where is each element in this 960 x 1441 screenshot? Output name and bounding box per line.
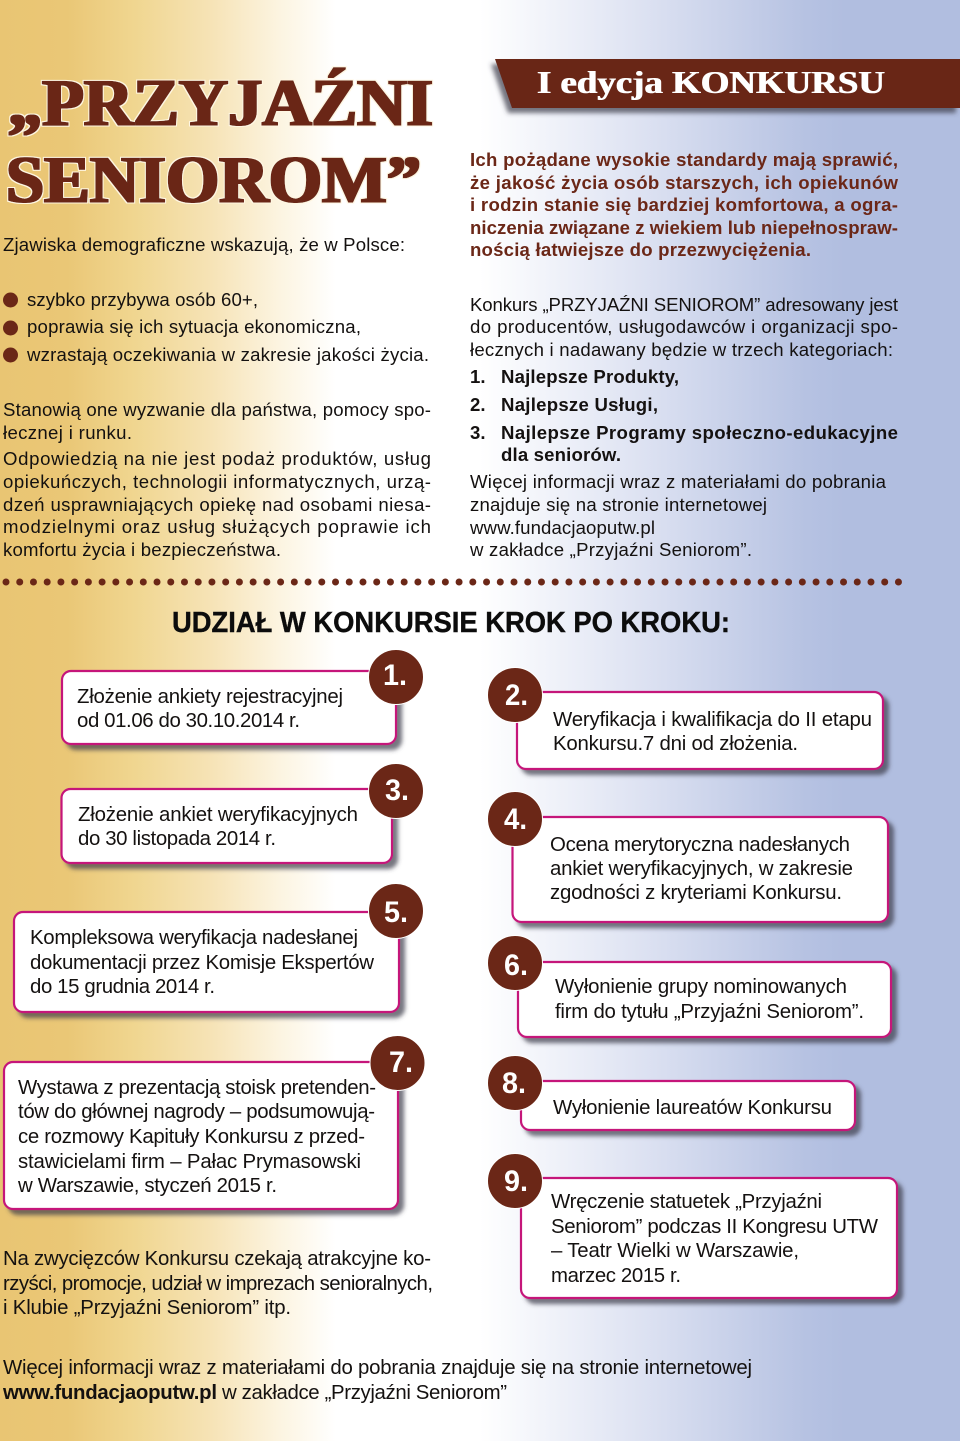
step 1: Złożenie ankiety rejestracyjnej xyxy=(77,686,343,708)
text block: response: opiekuńczych, technologii informatycznych, urzą- xyxy=(3,471,431,492)
footer text: www.fundacjaoputw.pl xyxy=(2,1382,217,1404)
text block: more information: Więcej informacji wraz z materiałami do pobrania xyxy=(470,471,887,492)
step 1 xyxy=(62,650,424,744)
step 1: 1. xyxy=(383,659,407,692)
footer text: w zakładce „Przyjaźni Seniorom” xyxy=(221,1382,507,1404)
step 5: do 15 grudnia 2014 r. xyxy=(30,976,215,998)
footer text: Więcej informacji wraz z materiałami do pobrania znajduje się na stronie internetowej xyxy=(3,1357,752,1379)
step 6: 6. xyxy=(504,949,528,982)
text block: standards (brown bold): nością łatwiejsze do przezwyciężenia. xyxy=(470,239,811,260)
text block: standards (brown bold): że jakość życia osób starszych, ich opiekunów xyxy=(470,172,899,193)
text block: standards (brown bold) xyxy=(470,149,899,260)
step 8: 8. xyxy=(502,1067,526,1100)
step 7: ce rozmowy Kapituły Konkursu z przed- xyxy=(18,1126,365,1148)
text block: more information: znajduje się na stronie internetowej xyxy=(470,494,767,515)
text block: response xyxy=(3,448,431,560)
bullet list: szybko przybywa osób 60+, xyxy=(27,289,258,310)
step 3 xyxy=(62,764,424,863)
category list: Najlepsze Usługi, xyxy=(501,394,658,415)
text block: standards (brown bold): i rodzin stanie się bardziej komfortowa, a ogra- xyxy=(470,194,898,215)
category list: Najlepsze Programy społeczno-edukacyjne xyxy=(501,422,898,443)
bullet list xyxy=(3,289,429,365)
text block: more information: w zakładce „Przyjaźni Seniorom”. xyxy=(469,539,752,560)
step 7: w Warszawie, styczeń 2015 r. xyxy=(17,1175,277,1197)
step 2: Weryfikacja i kwalifikacja do II etapu xyxy=(553,709,872,731)
step 2: 2. xyxy=(505,679,528,712)
text block: prizes: i Klubie „Przyjaźni Seniorom” itp. xyxy=(3,1297,291,1319)
step 5: dokumentacji przez Komisje Ekspertów xyxy=(30,952,374,974)
category list: Najlepsze Produkty, xyxy=(501,366,679,387)
step 1: od 01.06 do 30.10.2014 r. xyxy=(77,710,300,732)
category list: 1. xyxy=(470,366,486,387)
step 4: zgodności z kryteriami Konkursu. xyxy=(550,882,842,904)
banner: I edycja KONKURSU: I edycja KONKURSU xyxy=(537,64,885,100)
text block: challenge: łecznej i runku. xyxy=(3,422,132,443)
text block: contest description: Konkurs „PRZYJAŹNI SENIOROM” adresowany jest xyxy=(470,294,899,315)
step 8 xyxy=(488,1056,855,1130)
step 4: Ocena merytoryczna nadesłanych xyxy=(550,834,850,856)
text block: challenge: Stanowią one wyzwanie dla państwa, pomocy spo- xyxy=(3,399,431,420)
text block: standards (brown bold): Ich pożądane wysokie standardy mają sprawić, xyxy=(470,149,898,170)
step 2 xyxy=(488,668,883,769)
step 9: Wręczenie statuetek „Przyjaźni xyxy=(551,1191,822,1213)
text block: more information: www.fundacjaoputw.pl xyxy=(469,517,655,538)
text block: response: Odpowiedzią na nie jest podaż produktów, usług xyxy=(3,448,431,469)
step 3: 3. xyxy=(385,774,409,807)
title: SENIOROM” xyxy=(6,143,421,217)
bullet list: wzrastają oczekiwania w zakresie jakości życia. xyxy=(26,344,429,365)
bullet list: poprawia się ich sytuacja ekonomiczna, xyxy=(27,316,361,337)
step 7: stawicielami firm – Pałac Prymasowski xyxy=(18,1151,361,1173)
text block: response: modzielnymi oraz usług służących poprawie ich xyxy=(3,516,431,537)
step 3: Złożenie ankiet weryfikacyjnych xyxy=(78,804,358,826)
dotted separator xyxy=(6,578,900,586)
step 6: Wyłonienie grupy nominowanych xyxy=(555,976,847,998)
text block: response: dzeń usprawniających opiekę nad osobami niesa- xyxy=(3,494,431,515)
text block: response: komfortu życia i bezpieczeństwa. xyxy=(3,539,281,560)
category list: 2. xyxy=(470,394,486,415)
step 9: 9. xyxy=(504,1165,528,1198)
step 5: Kompleksowa weryfikacja nadesłanej xyxy=(30,927,358,949)
step 2: Konkursu.7 dni od złożenia. xyxy=(553,733,798,755)
step 5: 5. xyxy=(384,896,408,929)
step 8: Wyłonienie laureatów Konkursu xyxy=(553,1097,832,1119)
text block: contest description: do producentów, usługodawców i organizacji spo- xyxy=(470,316,898,337)
step 7: tów do głównej nagrody – podsumowują- xyxy=(18,1101,375,1123)
footer text xyxy=(2,1357,752,1404)
step 9: Seniorom” podczas II Kongresu UTW xyxy=(551,1216,879,1238)
step 4 xyxy=(488,792,888,922)
step 4: 4. xyxy=(504,803,527,836)
step 5 xyxy=(14,884,424,1012)
heading: steps: UDZIAŁ W KONKURSIE KROK PO KROKU: xyxy=(172,607,730,639)
step 4: ankiet weryfikacyjnych, w zakresie xyxy=(550,858,853,880)
banner: I edycja KONKURSU xyxy=(495,59,960,108)
text block: intro line: Zjawiska demograficzne wskazują, że w Polsce: xyxy=(3,234,405,255)
text block: prizes: Na zwycięzców Konkursu czekają atrakcyjne ko- xyxy=(3,1248,431,1270)
step 9: marzec 2015 r. xyxy=(551,1265,681,1287)
step 6 xyxy=(488,936,891,1037)
title: „PRZYJAŹNI xyxy=(8,66,433,140)
step 7: 7. xyxy=(389,1046,413,1079)
step 7: Wystawa z prezentacją stoisk pretenden- xyxy=(18,1077,376,1099)
text block: more information xyxy=(469,471,887,560)
text block: prizes: rzyści, promocje, udział w imprezach senioralnych, xyxy=(3,1273,433,1295)
step 6: firm do tytułu „Przyjaźni Seniorom”. xyxy=(555,1001,864,1023)
category list: dla seniorów. xyxy=(501,444,621,465)
text block: standards (brown bold): niczenia związane z wiekiem lub niepełnospraw- xyxy=(470,217,898,238)
category list: 3. xyxy=(470,422,486,443)
text block: prizes xyxy=(3,1248,433,1319)
step 7 xyxy=(4,1036,425,1209)
text block: contest description xyxy=(470,294,899,360)
title xyxy=(6,66,433,217)
text block: challenge xyxy=(3,399,431,443)
step 9: – Teatr Wielki w Warszawie, xyxy=(551,1240,799,1262)
step 3: do 30 listopada 2014 r. xyxy=(78,828,276,850)
category list xyxy=(470,366,898,465)
step 9 xyxy=(488,1154,897,1298)
text block: contest description: łecznych i nadawany będzie w trzech kategoriach: xyxy=(470,339,893,360)
